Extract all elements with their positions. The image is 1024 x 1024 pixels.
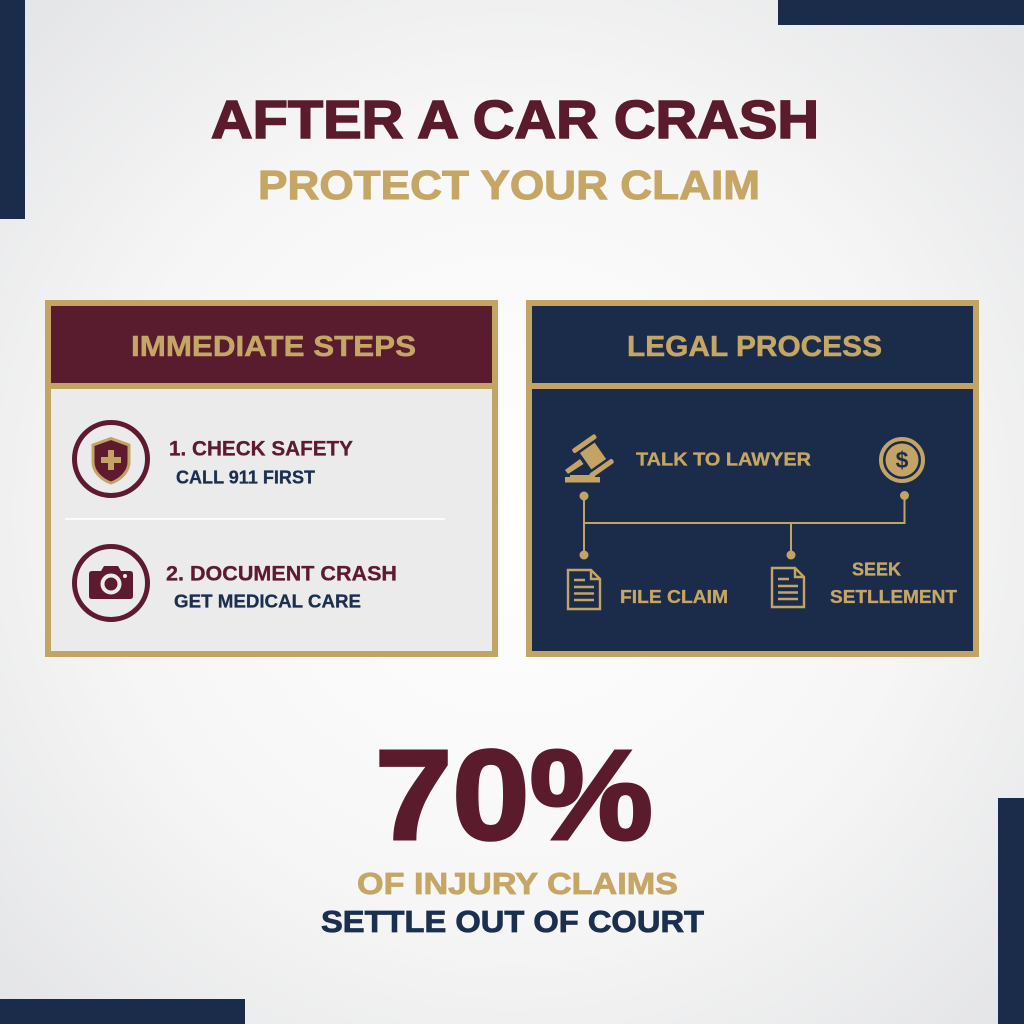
heading: legal process: LEGAL PROCESS <box>627 331 882 363</box>
corner accent: bottom right <box>998 798 1024 1024</box>
heading: immediate steps: IMMEDIATE STEPS <box>131 331 416 363</box>
icon: document <box>772 568 804 607</box>
connector diagram <box>580 491 909 560</box>
label: seek settlement: SETLLEMENT <box>830 586 958 607</box>
corner accent: bottom left <box>0 999 245 1024</box>
label: talk to lawyer: TALK TO LAWYER <box>636 448 811 470</box>
icon: dollar coin: $ <box>896 447 909 473</box>
panel: legal process <box>529 303 976 654</box>
corner accent: top right <box>778 0 1024 25</box>
step 2 detail: GET MEDICAL CARE <box>174 590 361 612</box>
step 1 detail: CALL 911 FIRST <box>176 466 316 488</box>
statistic caption: gold: OF INJURY CLAIMS <box>357 866 678 901</box>
panel: immediate steps <box>48 303 495 654</box>
icon: camera in circle <box>74 546 148 620</box>
step 1 title: 1. CHECK SAFETY <box>169 438 353 460</box>
panel header: immediate steps <box>51 306 492 383</box>
label: seek settlement <box>830 558 958 607</box>
big statistic: 70% <box>375 724 653 867</box>
label: seek settlement: SEEK <box>852 558 902 580</box>
statistic caption: navy: SETTLE OUT OF COURT <box>321 904 704 939</box>
icon: shield in circle <box>74 422 148 496</box>
icon: gavel <box>565 434 615 482</box>
title: AFTER A CAR CRASH <box>211 90 819 150</box>
icon: document <box>568 570 600 609</box>
label: file claim: FILE CLAIM <box>620 586 728 607</box>
corner accent: top left <box>0 0 25 219</box>
subtitle: PROTECT YOUR CLAIM <box>258 162 760 208</box>
icon: dollar coin <box>881 439 923 481</box>
step 2 title: 2. DOCUMENT CRASH <box>166 562 397 586</box>
